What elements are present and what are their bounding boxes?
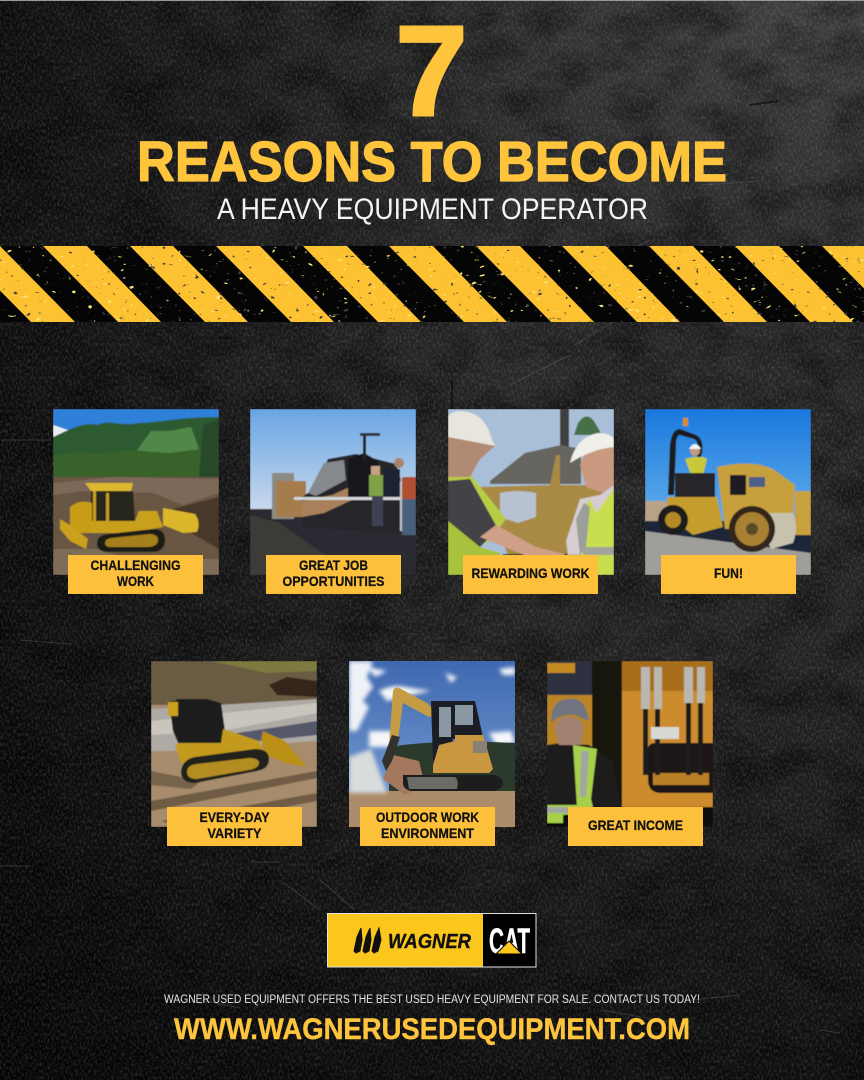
label: great job opportunities: OPPORTUNITIES xyxy=(282,573,384,589)
panel: great job opportunities xyxy=(250,409,416,594)
label: great job opportunities xyxy=(266,555,401,594)
label: rewarding work: REWARDING WORK xyxy=(472,565,590,581)
label: rewarding work xyxy=(463,555,598,594)
label: challenging work: WORK xyxy=(117,573,154,589)
label: great income xyxy=(568,807,703,846)
photo: operator on compact roller xyxy=(645,409,811,575)
icon: wagner mark xyxy=(354,928,381,953)
panel: great income xyxy=(547,661,713,846)
photo: mini excavator under blue sky xyxy=(349,661,515,827)
photo: dozer on graded dirt xyxy=(151,661,317,827)
panel: outdoor work environment xyxy=(349,661,515,846)
footer website url: WWW.WAGNERUSEDEQUIPMENT.COM xyxy=(174,1013,690,1046)
icon: cat triangle xyxy=(496,941,522,954)
panel: fun xyxy=(645,409,811,594)
label: every-day variety xyxy=(167,807,302,846)
photo: dozer in front of mountains xyxy=(53,409,219,575)
panel: every-day variety xyxy=(151,661,317,846)
heading: reasons to become: REASONS TO BECOME xyxy=(137,130,727,194)
footer tagline: WAGNER USED EQUIPMENT OFFERS THE BEST USED HEAVY EQUIPMENT FOR SALE. CONTACT US TODAY! xyxy=(164,994,700,1006)
photo: paving crew xyxy=(250,409,416,575)
photo: worker inspecting hydraulic hoses xyxy=(547,661,713,827)
wagner wordmark: WAGNER xyxy=(388,931,472,953)
label: every-day variety: EVERY-DAY xyxy=(200,809,270,825)
hazard stripe band xyxy=(0,246,864,322)
photo: workers shaking hands xyxy=(448,409,614,575)
label: every-day variety: VARIETY xyxy=(208,825,262,841)
label: outdoor work environment: ENVIRONMENT xyxy=(381,825,474,841)
logo: wagner and cat xyxy=(328,914,536,967)
label: great job opportunities: GREAT JOB xyxy=(299,557,368,573)
label: outdoor work environment: OUTDOOR WORK xyxy=(376,809,479,825)
panel: challenging work xyxy=(53,409,219,594)
label: great income: GREAT INCOME xyxy=(588,817,683,833)
label: challenging work xyxy=(68,555,203,594)
label: fun xyxy=(661,555,796,594)
label: challenging work: CHALLENGING xyxy=(90,557,181,573)
label: outdoor work environment xyxy=(360,807,495,846)
label: fun: FUN! xyxy=(714,565,743,581)
cat wordmark: CAT xyxy=(489,922,530,961)
subheading: a heavy equipment operator: A HEAVY EQUIPMENT OPERATOR xyxy=(217,193,648,226)
panel: rewarding work xyxy=(448,409,614,594)
heading: big number 7: 7 xyxy=(396,0,468,143)
